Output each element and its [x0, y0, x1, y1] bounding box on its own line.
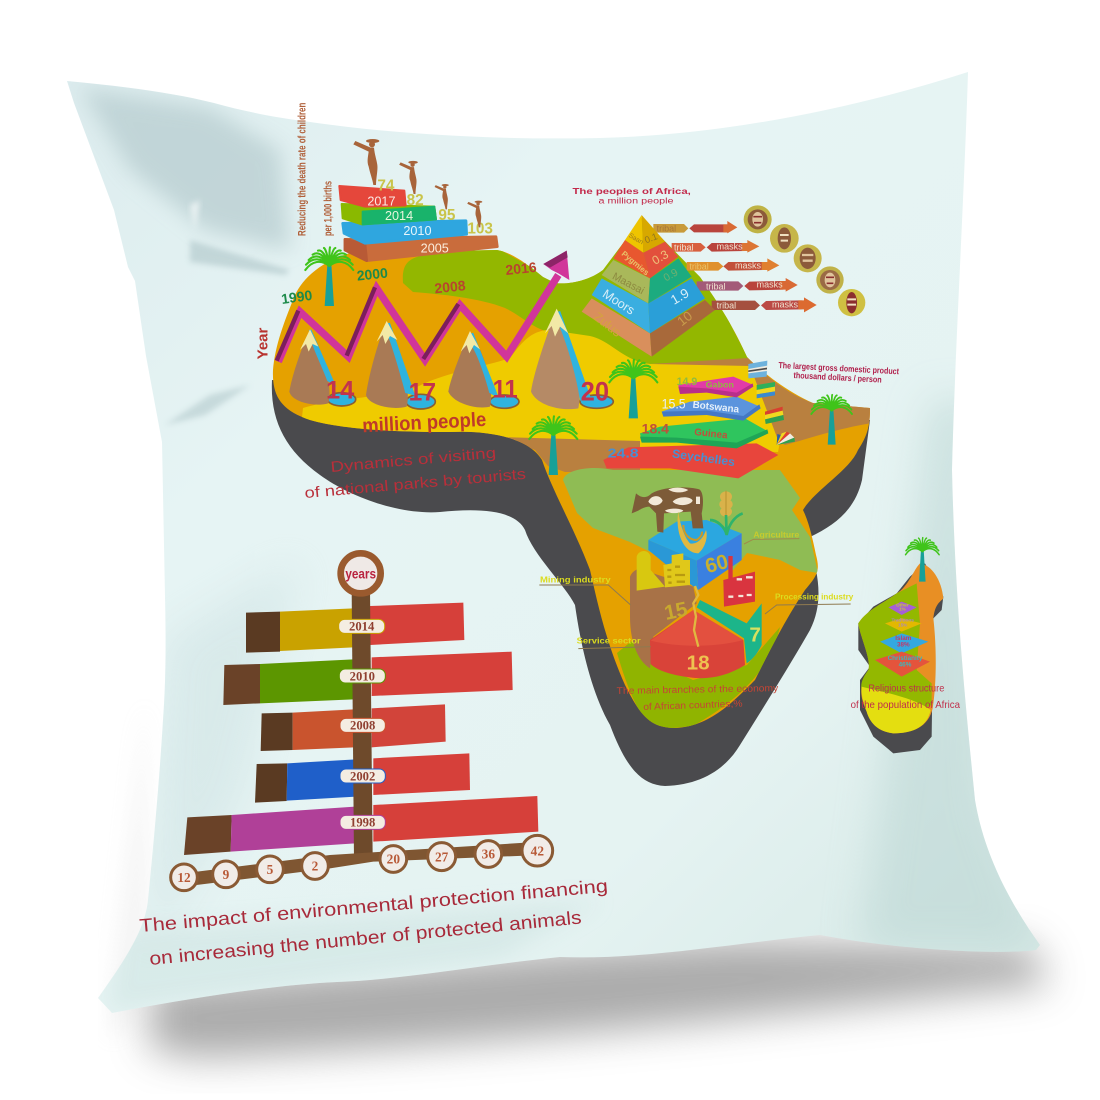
tier: Saan: 0.1 [643, 231, 659, 245]
heading: peoples of Africa: a million people [598, 197, 674, 206]
block: Guinea [640, 418, 768, 448]
axis label: Year: Year [254, 327, 271, 359]
arrows: tribal masks: masks [735, 261, 761, 271]
chart heading: dynamics of visiting national parks [304, 445, 527, 502]
label: processing industry: Processing industry [775, 591, 854, 601]
segment: processing 7 [697, 600, 762, 663]
value 12 [171, 864, 197, 891]
segment: service 18: 18 [687, 651, 710, 674]
year labels: 1990 [280, 287, 313, 307]
tier: Maasai [602, 258, 692, 303]
segment: mining 15: 15 [662, 598, 690, 625]
year labels [280, 259, 537, 307]
value 36 [475, 841, 502, 867]
diamond: christianity: Christianity [888, 655, 923, 662]
pyramid: peoples of Africa [582, 215, 715, 357]
value 20 [380, 846, 407, 872]
heading: peoples of Africa: The peoples of Africa, [572, 186, 691, 196]
icon: palm tree centre [609, 360, 657, 418]
diamond: traditional: 15% [898, 623, 908, 628]
bar 2010 [223, 652, 513, 705]
tier: Zulus: Zulus [591, 310, 624, 340]
arrows: tribal masks: tribal [706, 281, 725, 291]
island top [858, 563, 943, 733]
heading: main branches: of African countries,% [643, 699, 743, 713]
island yellow [861, 687, 931, 733]
year labels: 2016 [505, 259, 537, 278]
block: Botswana: 15.5 [662, 395, 686, 411]
mountain 14 [289, 329, 356, 406]
segment: agriculture 60: 60 [703, 550, 731, 578]
icon: flag Gabon [757, 382, 775, 398]
icon: factory [723, 556, 755, 607]
value 2 [302, 853, 328, 879]
value labels: 103 [467, 220, 493, 237]
island side [858, 563, 943, 753]
bar 2002 [255, 753, 470, 803]
pill 2014 [339, 619, 385, 634]
diamond: islam [880, 633, 928, 653]
block 2010: 2010 [403, 224, 431, 238]
value labels: 74 [377, 178, 395, 195]
block: Guinea: Guinea [694, 427, 728, 442]
segment: service 18 [650, 610, 745, 678]
segment: processing 7: 7 [749, 624, 761, 647]
heading: main branches: The main branches of the economy [617, 683, 779, 697]
block 2017 [339, 186, 406, 208]
value 9: 9 [223, 867, 230, 882]
pill 2010 [339, 669, 385, 683]
diamond: traditional: Traditions [892, 617, 914, 622]
block: Botswana [662, 395, 761, 421]
diamond: other: Other [896, 603, 909, 608]
map surface [273, 218, 870, 728]
chart heading: dynamics of visiting national parks: Dynamics of visiting [330, 445, 497, 476]
segment: mining 15 [630, 569, 697, 668]
tier: Maasai: Maasai [610, 270, 646, 297]
bar 1998 [184, 796, 538, 855]
value 42: 42 [531, 843, 544, 858]
label: agriculture [744, 529, 800, 544]
heading: peoples of Africa [572, 186, 691, 206]
arrows: tribal masks: tribal [717, 301, 736, 311]
value 27: 27 [435, 849, 449, 864]
icon: palm tree Madagascar [906, 538, 939, 582]
arrows: tribal masks: masks [757, 279, 783, 289]
chart: environmental financing and protected animals [171, 553, 553, 891]
arrows: tribal masks: masks [697, 223, 724, 233]
icon: flag Guinea [765, 407, 784, 424]
label: mining industry [539, 575, 631, 605]
arrows: tribal masks: tribal [689, 262, 709, 272]
value labels: 82 [407, 192, 424, 209]
tier: Moors [592, 278, 705, 333]
block: Guinea: 18.4 [642, 420, 669, 436]
map colour regions [300, 215, 875, 730]
tier: Moors: Moors [600, 287, 637, 318]
block 2010 [343, 221, 467, 243]
diamond: islam: 38% [897, 642, 910, 649]
panel: economy of African countries [539, 487, 961, 753]
mountain 17: 17 [409, 379, 436, 407]
tier: Pygmies: Pygmies [620, 249, 651, 278]
block: Botswana: Botswana [692, 400, 740, 416]
label: processing industry [765, 591, 854, 614]
arrows: tribal masks: masks [717, 241, 743, 251]
icons: masks [744, 205, 865, 316]
tier: Zulus: 10 [674, 308, 695, 329]
mountain 20 [531, 309, 613, 409]
island green [858, 583, 932, 710]
block 2014 [342, 204, 436, 224]
value labels [377, 178, 493, 237]
block: Gabon: Gabon [706, 380, 734, 390]
heading: religious structure [851, 683, 961, 711]
chart: dynamics of visiting national parks [254, 102, 613, 437]
panel: Madagascar [858, 538, 943, 753]
map of Africa [272, 215, 875, 786]
tier: Pygmies [613, 240, 678, 278]
icons: figures [353, 139, 482, 227]
block: Seychelles: 24.8 [608, 445, 639, 460]
mountain 11 [448, 331, 519, 408]
label: death rate axis: per 1,000 births [322, 181, 334, 236]
heading: environmental protection financing: The impact of environmental protection financing [139, 875, 609, 936]
value 5 [257, 856, 283, 883]
arrows: tribal masks [653, 221, 817, 312]
icon: wheat [710, 491, 743, 535]
bar 2008 [261, 704, 446, 751]
block: Gabon [677, 376, 753, 397]
pill 2008: 2008 [350, 719, 375, 733]
panel: peoples and GDP [529, 186, 899, 478]
heading: religious structure: of the population of Africa [851, 700, 961, 711]
heading: religious structure: Religious structure [868, 683, 944, 694]
tier: Zulus [582, 298, 715, 357]
chart: religious structure diamonds [875, 602, 930, 677]
block 2005: 2005 [421, 241, 449, 255]
block 2017: 2017 [367, 194, 395, 208]
pillow shadow [110, 700, 1050, 1058]
icon: palm tree west [529, 416, 577, 475]
crack [693, 586, 698, 647]
pill 2010: 2010 [350, 669, 375, 683]
value 42 [522, 835, 553, 866]
value 12: 12 [177, 870, 191, 885]
diamond: other [888, 602, 917, 615]
label: death rate axis: Reducing the death rate of children [296, 102, 308, 236]
heading: environmental protection financing: on increasing the number of protected animals [148, 906, 582, 969]
tier: Saan: Saan [627, 232, 645, 246]
heading: largest GDP: The largest gross domestic product [778, 360, 899, 376]
arrows: tribal masks: tribal [674, 243, 693, 253]
icon: cow [632, 487, 703, 533]
icon: flag Seychelles [777, 432, 795, 445]
heading: largest GDP: thousand dollars / person [793, 370, 882, 385]
pill 2008 [340, 718, 385, 733]
block 2014: 2014 [385, 209, 413, 223]
circle: years [341, 553, 381, 593]
value labels: 95 [438, 207, 456, 224]
tier: Moors: 1.9 [668, 285, 692, 308]
block: Seychelles: Seychelles [671, 446, 736, 469]
segment: agriculture 60 [648, 520, 742, 590]
scale circles [171, 835, 553, 891]
diamond: christianity [875, 652, 930, 677]
line chart: zigzag arrow [277, 251, 569, 362]
mountain 17 [366, 321, 436, 409]
pillow body [67, 72, 1040, 1013]
label: death rate axis [296, 102, 334, 236]
label: service sector [577, 635, 651, 649]
icon: bananas [678, 512, 707, 553]
tier: Pygmies: 0.3 [649, 247, 671, 268]
value 9 [213, 861, 239, 888]
tier: Maasai: 0.9 [661, 266, 680, 284]
diamond: other: 1% [899, 607, 907, 612]
label: service sector: Service sector [577, 635, 642, 645]
heading: main branches [617, 683, 779, 713]
number: 20: 20 [581, 377, 609, 407]
diamond: christianity: 46% [899, 662, 912, 669]
value 36: 36 [482, 847, 495, 862]
label: mining industry: Mining industry [540, 575, 611, 585]
tier: Saan [625, 215, 665, 253]
map shadow side [272, 380, 870, 786]
block: Gabon: 14.9 [677, 376, 697, 388]
stacked blocks: death rate [339, 139, 497, 261]
diamond: traditional [885, 617, 922, 632]
value 27 [428, 843, 456, 871]
timeline post and base [183, 590, 542, 887]
heading: environmental protection financing [139, 875, 609, 969]
pill 1998 [340, 815, 385, 830]
icon: flag Botswana [748, 361, 767, 378]
bar 2014 [246, 603, 464, 653]
chart heading: dynamics of visiting national parks: of national parks by tourists [304, 466, 527, 502]
pill 2002 [340, 769, 385, 783]
value 2: 2 [312, 859, 319, 874]
value 20: 20 [387, 852, 400, 867]
year pills [339, 619, 385, 830]
arrows: tribal masks: masks [772, 300, 798, 310]
arrows: tribal masks: tribal [657, 224, 676, 234]
icon: palm tree east [811, 395, 852, 445]
pill 2014: 2014 [349, 620, 375, 634]
icon: city [637, 551, 690, 591]
icon: palm tree [305, 247, 353, 306]
value 5: 5 [267, 862, 274, 877]
pill 2002: 2002 [350, 769, 375, 783]
mountain 14: 14 [326, 377, 354, 405]
year labels: 2008 [434, 277, 466, 296]
year labels: 2000 [356, 264, 389, 284]
block: Seychelles [603, 443, 778, 478]
label: million people: million people [362, 409, 487, 437]
pill 1998: 1998 [350, 816, 375, 830]
mountain 11: 11 [493, 375, 518, 403]
label: agriculture: Agriculture [753, 529, 800, 539]
circle: years: years [345, 565, 376, 581]
block 2005 [345, 237, 497, 261]
heading: largest GDP [778, 360, 899, 385]
diamond: islam: Islam [895, 635, 912, 642]
